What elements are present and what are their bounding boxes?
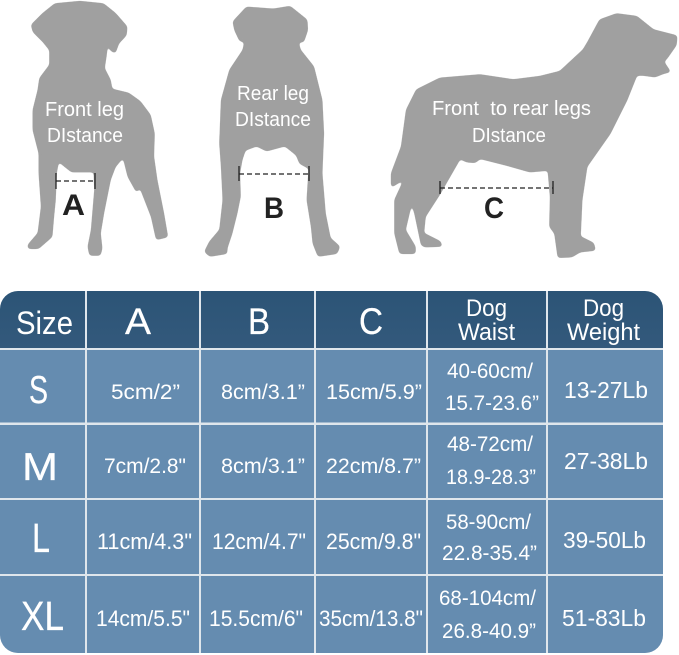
row: size S	[29, 360, 648, 415]
row: size M: 22cm/8.7”	[326, 455, 421, 478]
row: size M: 48-72cm/	[447, 433, 533, 456]
label: front leg distance: DIstance	[47, 125, 123, 147]
panel: front leg distance dog	[28, 2, 167, 255]
row: size L: 58-90cm/	[446, 511, 531, 534]
label: front leg distance	[45, 99, 124, 147]
row: size S: 15.7-23.6”	[445, 392, 539, 415]
row: size M: 7cm/2.8"	[104, 455, 186, 478]
row: size XL: 51-83Lb	[562, 605, 646, 631]
row: size L: 39-50Lb	[563, 527, 646, 553]
row: size M: M	[22, 446, 58, 489]
row: size S: 5cm/2”	[111, 381, 180, 404]
panel: front to rear legs distance dog	[392, 14, 677, 257]
row: size M: 27-38Lb	[564, 448, 648, 474]
row: size XL	[21, 587, 646, 643]
row: size XL: 26.8-40.9”	[442, 620, 536, 643]
panel: rear leg distance dog	[205, 7, 339, 256]
table header row: Dog	[466, 295, 507, 322]
row: size XL: 35cm/13.8"	[319, 606, 423, 631]
icon: dog front silhouette	[28, 2, 167, 255]
row: size S: 13-27Lb	[564, 377, 648, 403]
label: front to rear legs distance	[432, 98, 591, 147]
table header row: Waist	[458, 319, 515, 346]
row: size M	[22, 433, 648, 489]
label: rear leg distance: DIstance	[235, 109, 311, 131]
row: size L: 11cm/4.3"	[97, 529, 192, 554]
row: size L: 22.8-35.4”	[442, 542, 537, 565]
table header row	[16, 295, 640, 346]
row: size L: 12cm/4.7"	[212, 529, 306, 554]
label: front leg distance: Front leg	[45, 99, 124, 121]
icon: dog side silhouette	[392, 14, 677, 257]
table header row: Size	[16, 305, 73, 341]
letter A: A	[62, 189, 85, 222]
row: size L	[32, 511, 646, 565]
icon: dog rear silhouette	[205, 7, 339, 256]
row: size XL: 14cm/5.5"	[96, 606, 190, 631]
label: front to rear legs distance: DIstance	[472, 125, 546, 147]
letter C: C	[484, 192, 504, 225]
table header row: Dog	[583, 295, 624, 322]
measure line A	[56, 173, 95, 189]
row: size S: 15cm/5.9”	[326, 381, 422, 404]
size table	[0, 291, 663, 653]
row: size L: L	[32, 515, 50, 561]
table header row: Weight	[567, 319, 640, 346]
letter B: B	[264, 192, 284, 225]
row: size S: S	[29, 369, 48, 412]
label: front to rear legs distance: Front to rear legs	[432, 98, 591, 120]
row: size S: 40-60cm/	[447, 360, 533, 383]
measure line C	[440, 181, 553, 194]
row: size M: 18.9-28.3”	[446, 466, 536, 489]
row: size XL: 15.5cm/6"	[209, 606, 303, 631]
row: size M: 8cm/3.1”	[221, 455, 305, 478]
label: rear leg distance	[235, 83, 311, 131]
table header row: C	[359, 301, 383, 342]
table header row: B	[248, 301, 270, 342]
table cell backgrounds	[0, 291, 663, 653]
label: rear leg distance: Rear leg	[237, 83, 309, 105]
row: size S: 8cm/3.1”	[221, 381, 305, 404]
row: size XL: XL	[21, 593, 64, 639]
measure line B	[239, 166, 309, 181]
row: size L: 25cm/9.8"	[326, 529, 421, 554]
table header row: A	[125, 301, 151, 342]
row: size XL: 68-104cm/	[439, 587, 536, 610]
